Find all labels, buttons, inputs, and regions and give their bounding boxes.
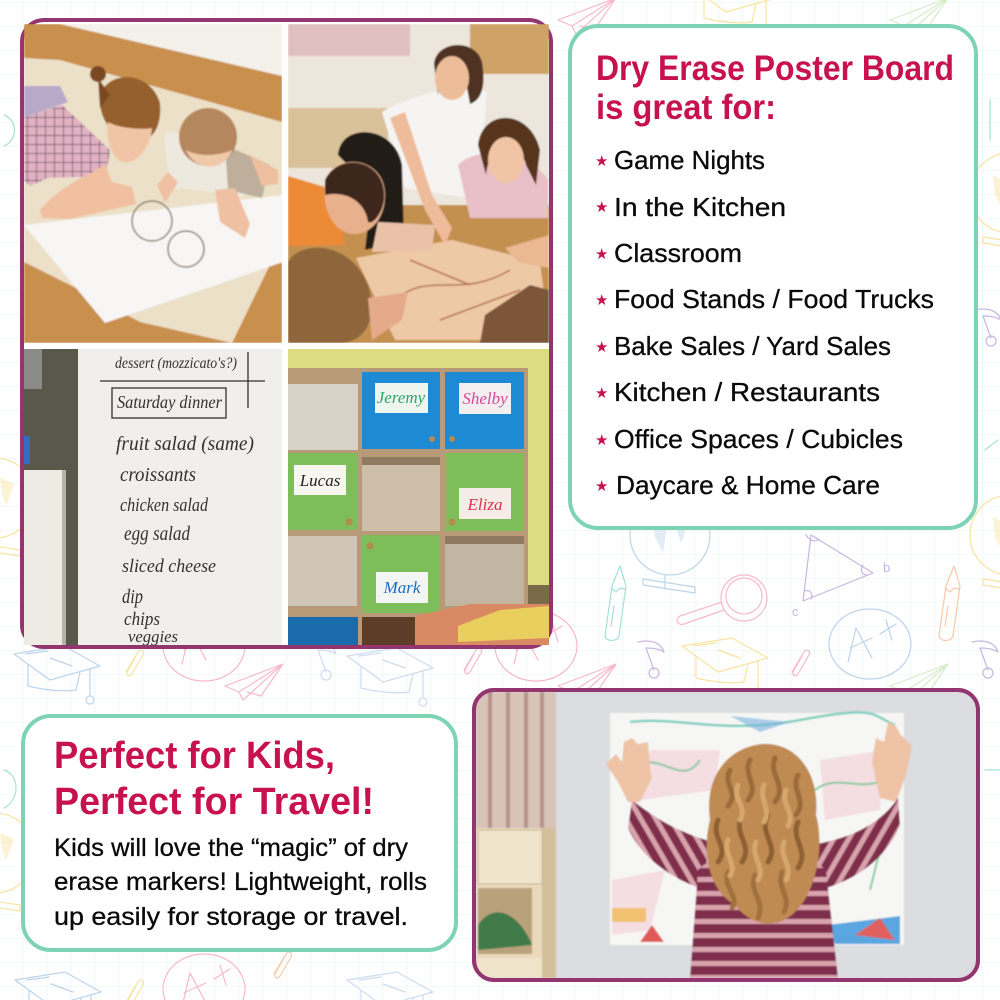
bullet list of uses: ★ <box>595 384 608 402</box>
bullet list of uses: ★ <box>595 152 608 170</box>
panel: photo collage <box>22 20 551 647</box>
child from behind <box>606 722 912 978</box>
bullet list of uses: ★ <box>595 431 608 449</box>
cubby labels: Jeremy <box>377 388 426 407</box>
handwritten menu text: Saturday dinner <box>117 392 223 412</box>
bullet list of uses <box>595 145 934 500</box>
heading: great for: Dry Erase Poster Board <box>596 49 954 88</box>
handwritten menu text: dessert (mozzicato's?) <box>115 355 237 372</box>
handwritten menu text: sliced cheese <box>122 556 216 577</box>
panel: child drawing on wall poster <box>474 690 978 980</box>
bullet list of uses: ★ <box>595 291 608 309</box>
photo: teacher and children with board game <box>288 24 549 343</box>
handwritten menu text <box>100 352 265 646</box>
cubby labels <box>294 383 511 603</box>
heading: great for: is great for: <box>596 88 776 127</box>
photo: children drawing on floor <box>24 24 283 343</box>
body text <box>54 834 427 931</box>
cubby labels: Lucas <box>299 471 341 490</box>
cubby labels: Mark <box>383 578 421 597</box>
photo: whiteboard with handwritten menu <box>24 349 282 646</box>
handwritten menu text: fruit salad (same) <box>116 433 254 455</box>
heading: great for <box>596 49 954 127</box>
poster with scribbles <box>610 712 904 945</box>
handwritten menu text: croissants <box>120 464 196 486</box>
handwritten menu text: veggies <box>128 627 178 646</box>
bullet list of uses: ★ <box>595 198 608 216</box>
body text: erase markers! Lightweight, rolls <box>54 868 427 896</box>
grid paper background: b <box>883 560 890 575</box>
bullet list of uses: Office Spaces / Cubicles <box>614 424 903 454</box>
handwritten menu text: egg salad <box>124 523 191 545</box>
body text: Kids will love the “magic” of dry <box>54 834 409 862</box>
curtain <box>476 692 556 828</box>
cubby labels: Eliza <box>467 495 502 514</box>
panel: perfect for kids and travel <box>23 716 456 950</box>
panel: uses list <box>570 26 976 528</box>
handwritten menu text: chips <box>124 609 160 630</box>
heading: perfect for kids: Perfect for Travel! <box>54 781 374 823</box>
dresser <box>476 828 556 978</box>
bullet list of uses: Classroom <box>614 238 742 268</box>
heading: perfect for kids <box>54 735 374 823</box>
bullet list of uses: ★ <box>595 477 608 495</box>
bullet list of uses: In the Kitchen <box>614 192 786 222</box>
handwritten menu text: dip <box>122 586 143 608</box>
bullet list of uses: ★ <box>595 245 608 263</box>
handwritten menu text: chicken salad <box>120 495 208 516</box>
photo: labelled classroom cubbies <box>288 349 549 645</box>
cubby labels: Shelby <box>462 389 508 408</box>
bullet list of uses: Food Stands / Food Trucks <box>614 284 934 314</box>
body text: up easily for storage or travel. <box>54 903 408 931</box>
bullet list of uses: Kitchen / Restaurants <box>614 377 880 407</box>
bullet list of uses: ★ <box>595 338 608 356</box>
bullet list of uses: Game Nights <box>614 145 765 175</box>
grid paper background: c <box>792 604 799 619</box>
bullet list of uses: Daycare & Home Care <box>616 470 880 500</box>
heading: perfect for kids: Perfect for Kids, <box>54 735 335 777</box>
bullet list of uses: Bake Sales / Yard Sales <box>614 331 891 361</box>
